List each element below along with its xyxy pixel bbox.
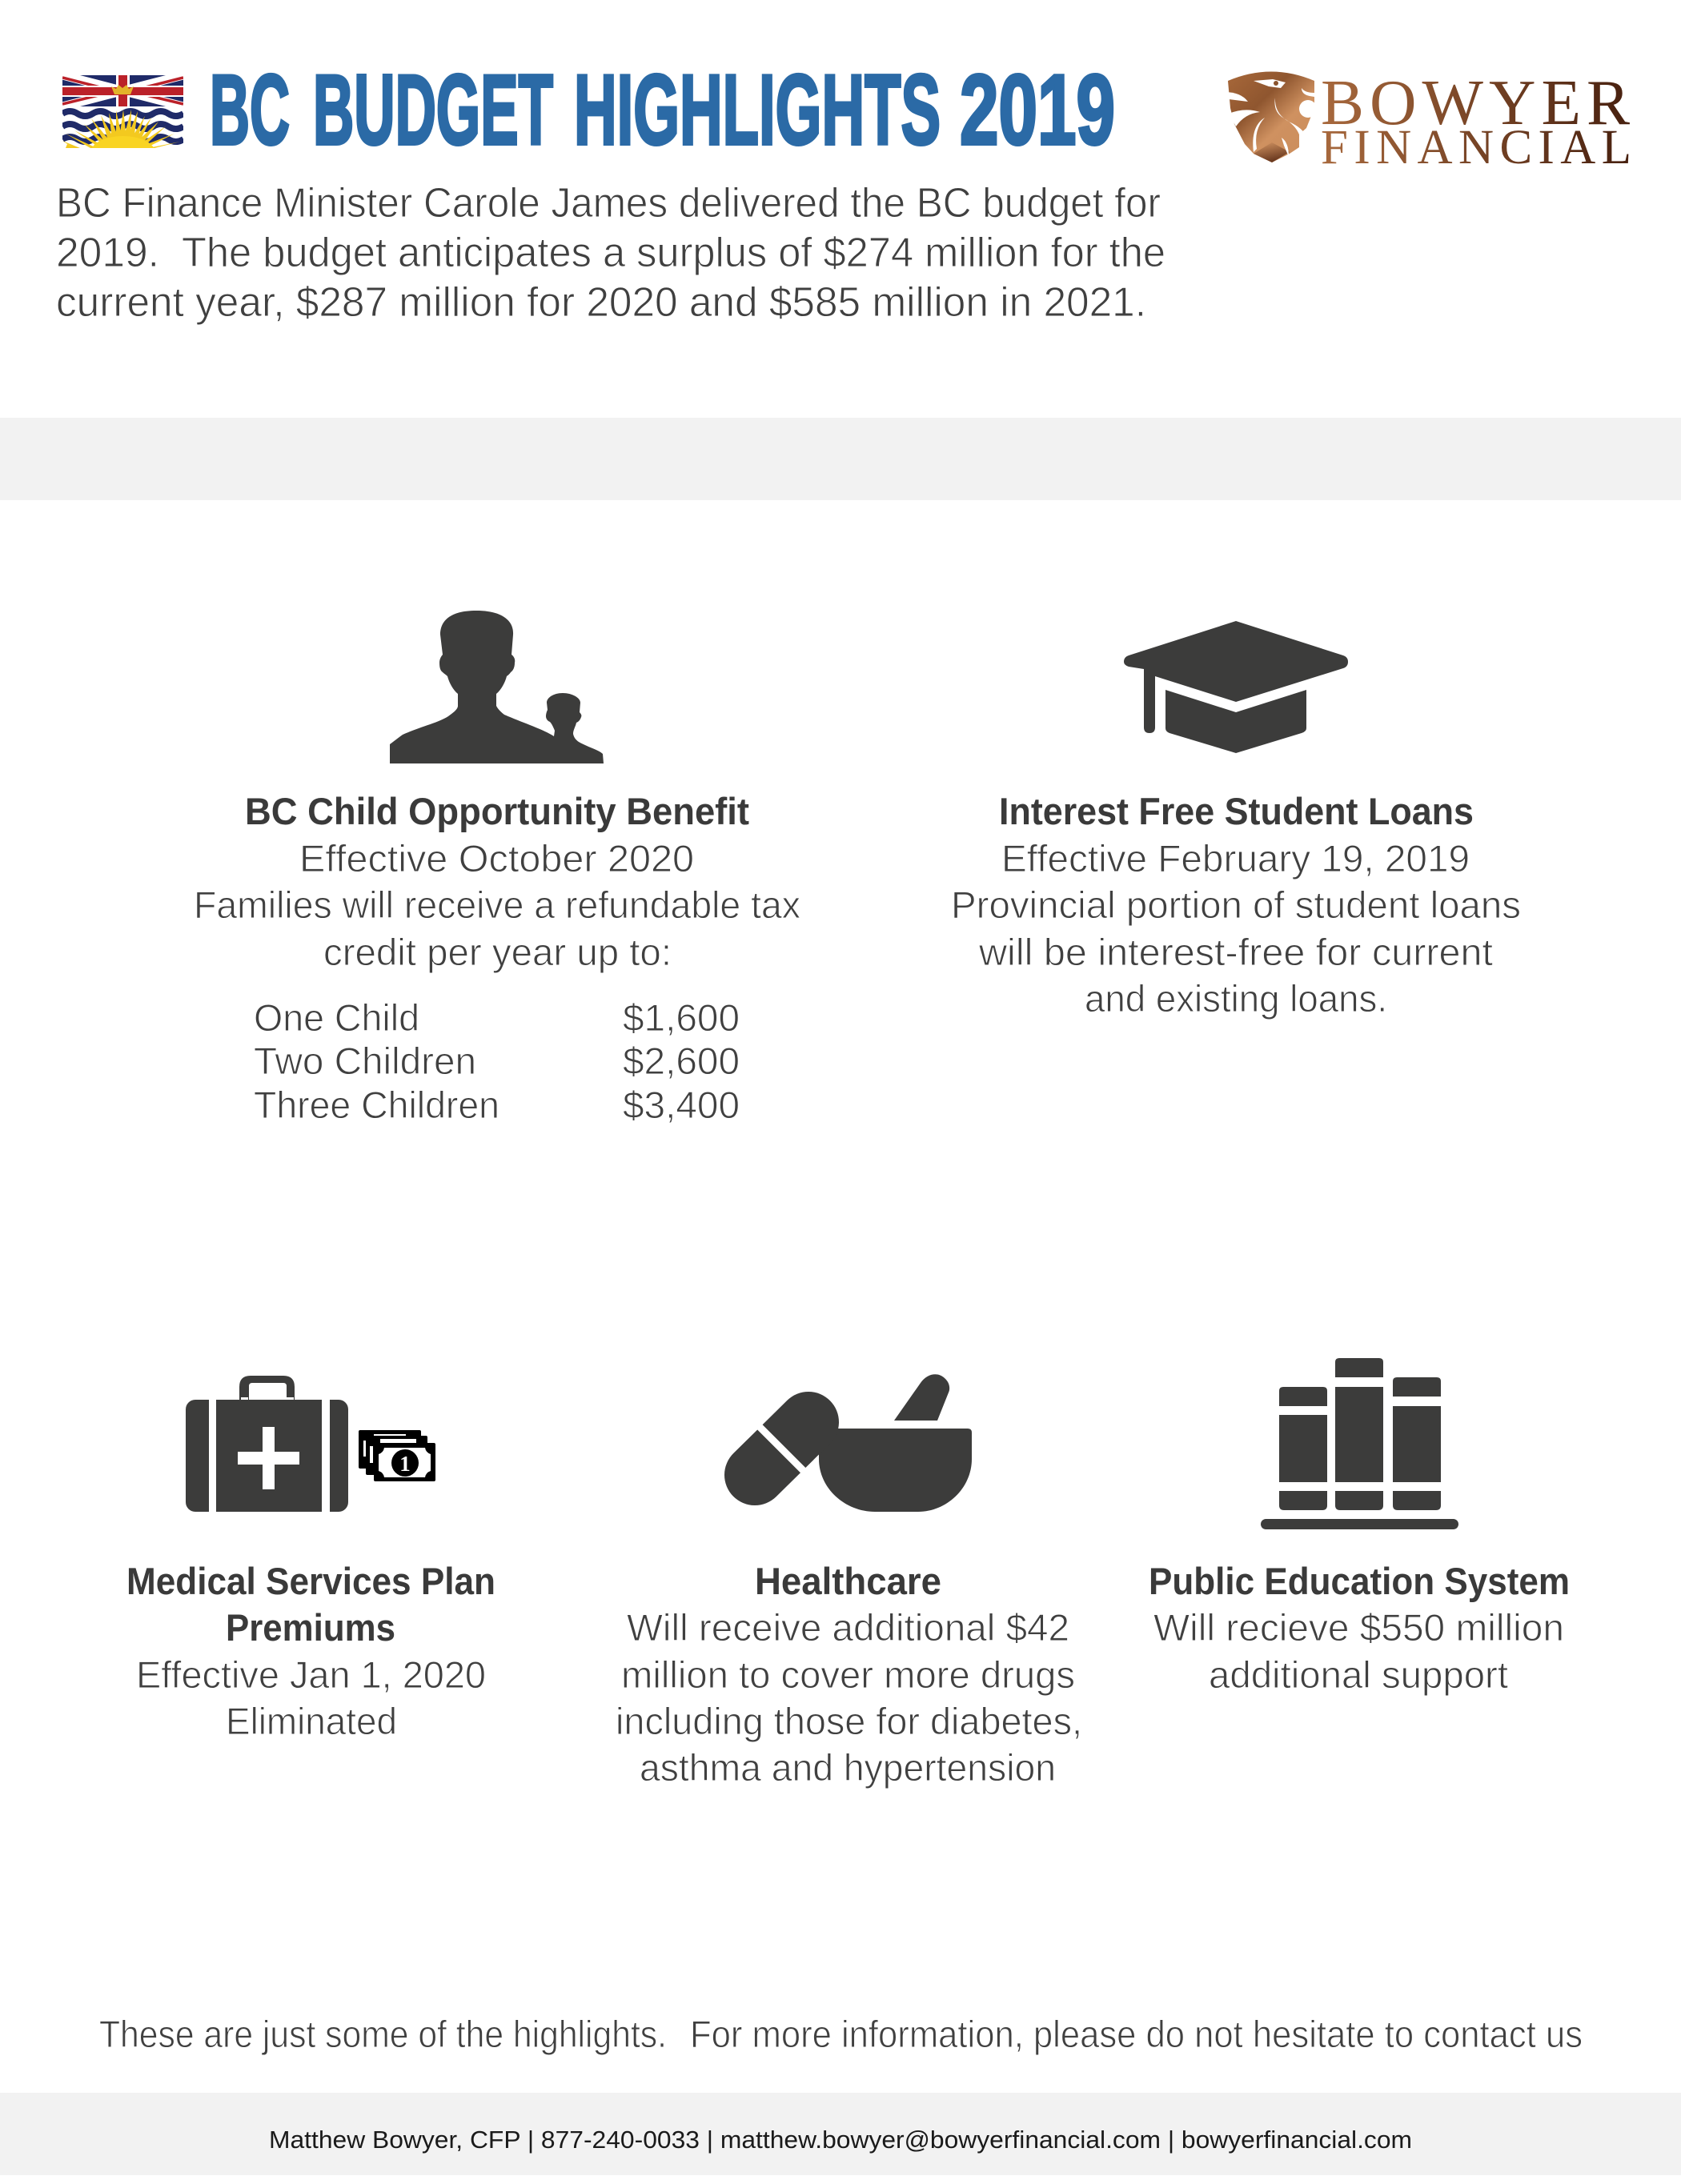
footer band — [0, 2093, 1681, 2175]
body text: asthma and hypertension — [640, 1746, 1056, 1789]
icon: BC flag — [62, 75, 183, 148]
panel: Public Education System — [1149, 1560, 1570, 1696]
panel: Healthcare — [616, 1560, 1082, 1789]
panel: Interest Free Student Loans — [951, 790, 1521, 1020]
closing note — [99, 2013, 1583, 2055]
body text: credit per year up to: — [323, 931, 672, 973]
title: HIGHLIGHTS — [574, 55, 941, 166]
closing note: For more information, please do not hesitate to contact us — [690, 2013, 1583, 2055]
benefit table — [254, 996, 740, 1126]
icon: money notes — [359, 1430, 435, 1481]
benefit table: $1,600 — [623, 996, 740, 1039]
heading: Medical Services Plan — [126, 1560, 495, 1602]
title — [210, 55, 1115, 166]
body text: including those for diabetes, — [616, 1700, 1082, 1742]
heading — [126, 1560, 495, 1649]
body text — [194, 837, 800, 973]
icon: money notes: 1 — [399, 1452, 411, 1476]
body text — [616, 1606, 1082, 1789]
body text — [1153, 1606, 1564, 1696]
intro text: current year, $287 million for 2020 and $585 million in 2021. — [56, 279, 1146, 326]
heading: BC Child Opportunity Benefit — [245, 790, 749, 832]
intro text: The budget anticipates a surplus of $274 million for the — [182, 230, 1165, 276]
logo wordmark: Financial: FINANCIAL — [1321, 121, 1631, 174]
benefit table: $2,600 — [623, 1040, 740, 1082]
body text: Will receive additional $42 — [627, 1606, 1069, 1649]
intro text — [56, 180, 1165, 326]
body text: Families will receive a refundable tax — [194, 884, 800, 926]
body text — [951, 837, 1521, 1020]
benefit table: Two Children — [254, 1040, 476, 1082]
panel: Medical Services Plan Premiums — [126, 1560, 495, 1742]
icon: parent and child — [390, 611, 604, 763]
body text: Will recieve $550 million — [1153, 1606, 1564, 1649]
body text: Provincial portion of student loans — [951, 884, 1521, 926]
body text — [136, 1653, 486, 1742]
heading: Public Education System — [1149, 1560, 1570, 1602]
body text: Effective Jan 1, 2020 — [136, 1653, 486, 1696]
benefit table: $3,400 — [623, 1084, 740, 1126]
body text: million to cover more drugs — [621, 1653, 1075, 1696]
logo shield — [1225, 72, 1317, 162]
panel: BC Child Opportunity Benefit — [194, 790, 800, 1126]
body text: Eliminated — [226, 1700, 397, 1742]
icon: books — [1261, 1358, 1458, 1529]
title: BUDGET — [313, 55, 553, 166]
body text: and existing loans. — [1085, 977, 1387, 1020]
icon: graduation cap — [1124, 621, 1348, 753]
body text: additional support — [1209, 1653, 1508, 1696]
body text: Effective October 2020 — [299, 837, 694, 880]
panel: grey divider band — [0, 418, 1681, 500]
title: 2019 — [960, 55, 1115, 166]
logo wordmark: Bowyer: BOWYER — [1321, 66, 1630, 138]
icon: medical case — [186, 1376, 348, 1512]
intro text: BC Finance Minister Carole James delivered the BC budget for — [56, 180, 1161, 226]
title: BC — [210, 55, 290, 166]
contact details: Matthew Bowyer, CFP | 877-240-0033 | matthew.bowyer@bowyerfinancial.com | bowyerfinancial.com — [269, 2126, 1412, 2154]
body text: Effective February 19, 2019 — [1001, 837, 1470, 880]
heading: Interest Free Student Loans — [999, 790, 1474, 832]
intro text: 2019. — [56, 230, 159, 276]
heading: Healthcare — [755, 1560, 941, 1602]
heading: Premiums — [226, 1606, 395, 1649]
icon: mortar, pestle and pill — [755, 1374, 972, 1512]
benefit table: One Child — [254, 996, 419, 1039]
body text: will be interest-free for current — [978, 931, 1493, 973]
logo: Bowyer Financial — [1225, 66, 1631, 174]
benefit table: Three Children — [254, 1084, 499, 1126]
closing note: These are just some of the highlights. — [99, 2013, 667, 2055]
